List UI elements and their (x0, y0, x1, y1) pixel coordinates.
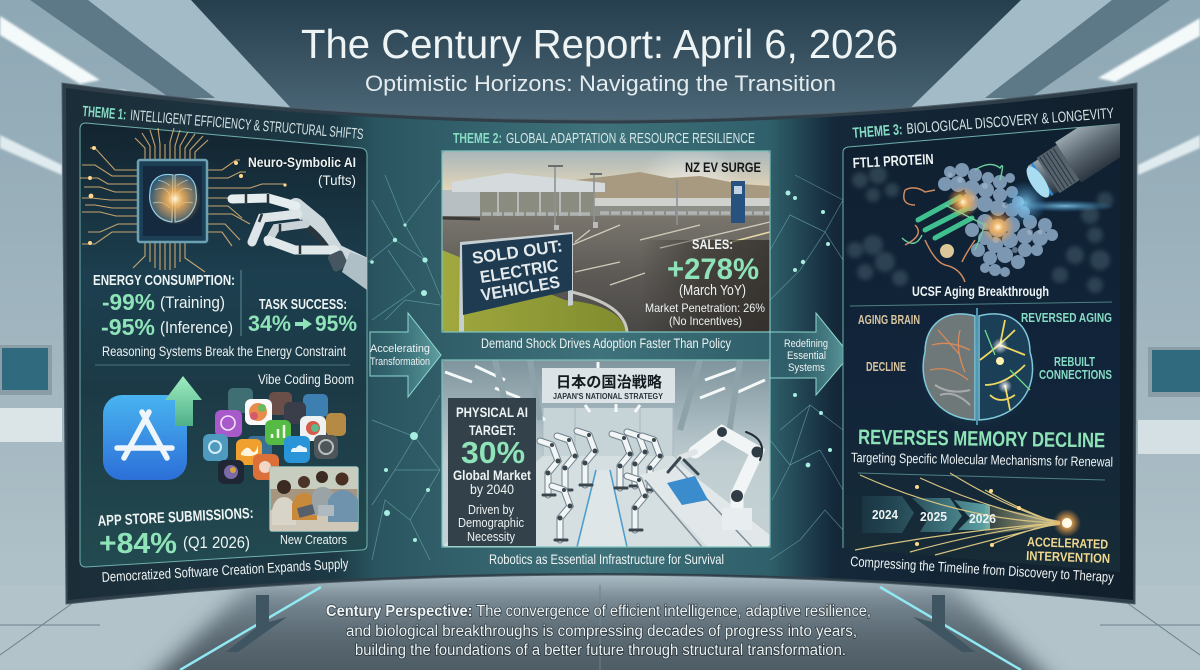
physical AI stat: Global Market (453, 467, 531, 483)
icon: microscope lens (1004, 124, 1120, 224)
blurred background molecules (847, 166, 1113, 293)
arrow: accelerating transformation: Accelerating (370, 343, 430, 355)
japan strategy banner: JAPAN'S NATIONAL STRATEGY (553, 392, 664, 401)
task success stat (248, 297, 357, 336)
brain labels: REBUILT (1054, 355, 1095, 369)
task success stat: 95% (315, 311, 357, 336)
physical AI stat: Demographic (458, 515, 524, 530)
sold out sign (459, 232, 573, 332)
sales stat: SALES: (692, 236, 733, 252)
theme 3 heading (852, 105, 1115, 142)
century perspective text: building the foundations of a better future through structural transformation. (355, 642, 846, 659)
caption: demand shock: Demand Shock Drives Adoption Faster Than Policy (481, 335, 731, 351)
sold out sign: ELECTRIC (479, 256, 560, 287)
theme 1 heading: INTELLIGENT EFFICIENCY & STRUCTURAL SHIFTS (130, 107, 364, 143)
monitor frame (62, 83, 1137, 604)
panel: theme 1 intelligent efficiency (80, 103, 375, 585)
physical AI stat: 30% (461, 435, 525, 470)
energy consumption stat: (Inference) (160, 318, 233, 337)
physical AI stat: by 2040 (470, 481, 514, 497)
sales stat: +278% (667, 253, 759, 286)
caption: reasoning systems: Reasoning Systems Break the Energy Constraint (102, 343, 346, 359)
century perspective text (326, 603, 871, 659)
NZ EV surge label: NZ EV SURGE (685, 159, 761, 175)
brain labels: REVERSED AGING (1021, 311, 1112, 325)
sales stat: (March YoY) (679, 282, 746, 299)
app icon cluster (203, 388, 346, 484)
energy consumption stat: -95% (101, 314, 155, 340)
timeline: accelerated intervention: 2025 (920, 510, 947, 524)
conveyor (640, 465, 770, 547)
plexus network (368, 175, 843, 560)
brain labels: CONNECTIONS (1039, 368, 1112, 382)
app store submissions stat: (Q1 2026) (183, 533, 250, 552)
photo: new creators (270, 467, 358, 531)
glow nodes (88, 146, 287, 245)
new creators caption: New Creators (280, 532, 347, 547)
app store submissions stat: +84% (99, 528, 177, 560)
theme 1 heading: THEME 1: (82, 103, 127, 124)
caption: compressing timeline: Compressing the Timeline from Discovery to Therapy (850, 553, 1114, 585)
timeline: accelerated intervention: 2026 (969, 512, 996, 526)
panel 3 frame (843, 124, 1120, 572)
theme 2 heading: GLOBAL ADAPTATION & RESOURCE RESILIENCE (506, 130, 755, 147)
UCSF caption: UCSF Aging Breakthrough (912, 283, 1049, 299)
arrow: accelerating transformation (370, 313, 441, 397)
arrow: redefining essential systems: Essential (787, 350, 826, 362)
energy consumption stat: ENERGY CONSUMPTION: (93, 272, 235, 289)
caption: robotics: Robotics as Essential Infrastructure for Survival (489, 551, 724, 567)
japan strategy banner: 日本の国治戦略 (556, 373, 662, 391)
theme 1 heading (82, 103, 364, 143)
physical AI stat: TARGET: (469, 422, 516, 438)
caption: targeting mechanisms: Targeting Specific Molecular Mechanisms for Renewal (851, 450, 1113, 470)
subtitle: Optimistic Horizons: Navigating the Transition (365, 71, 836, 96)
brain labels (858, 311, 1112, 382)
century perspective text: and biological breakthroughs is compressing decades of progress into years, (346, 623, 857, 640)
timeline: accelerated intervention (855, 473, 1110, 566)
panel 1 frame (80, 123, 367, 567)
headline: reverses memory decline: REVERSES MEMORY DECLINE (858, 426, 1105, 452)
timeline: accelerated intervention: INTERVENTION (1026, 548, 1110, 566)
timeline: accelerated intervention: ACCELERATED (1027, 534, 1108, 552)
caption: democratized software: Democratized Software Creation Expands Supply (101, 555, 349, 585)
sales stat: Market Penetration: 26% (645, 301, 765, 315)
icon: protein molecule (902, 163, 1058, 282)
energy consumption stat: -99% (102, 289, 155, 315)
physical AI stat: PHYSICAL AI (456, 404, 528, 420)
title: The Century Report: April 6, 2026 (301, 21, 898, 67)
sold out sign: SOLD OUT: (471, 236, 564, 268)
photo: NZ EV dealership (442, 140, 770, 332)
small robots (540, 431, 662, 540)
brain labels: AGING BRAIN (858, 313, 920, 327)
app store submissions stat (97, 505, 254, 560)
vibe coding label: Vibe Coding Boom (258, 372, 354, 387)
icon: chip with brain (138, 160, 207, 242)
photo: japan robotics factory (442, 360, 770, 547)
app store submissions stat: APP STORE SUBMISSIONS: (97, 505, 254, 530)
sales stat (645, 236, 765, 328)
icon: up arrow (165, 376, 202, 426)
icon: split brain (915, 306, 1039, 430)
arrow: redefining essential systems (770, 313, 850, 395)
century perspective text: Century Perspective: The convergence of efficient intelligence, adaptive resilience, (326, 603, 871, 620)
theme 2 heading (453, 130, 755, 147)
icon: app store (103, 395, 187, 480)
panel: theme 2 global adaptation (442, 130, 770, 567)
theme 3 heading: THEME 3: (852, 121, 903, 142)
neuro-symbolic label: Neuro-Symbolic AI (248, 154, 356, 170)
circuit traces (80, 128, 285, 272)
sales stat: (No Incentives) (669, 314, 742, 328)
arrow: redefining essential systems: Systems (788, 362, 825, 374)
FTL1 label: FTL1 PROTEIN (852, 152, 934, 172)
energy consumption stat (93, 272, 235, 340)
neuro-symbolic label: (Tufts) (318, 172, 356, 188)
task success stat: TASK SUCCESS: (259, 297, 347, 313)
physical AI stat: Necessity (467, 529, 515, 544)
arrow: redefining essential systems: Redefining (784, 338, 828, 350)
japan strategy banner (542, 368, 675, 403)
panel: theme 3 biological discovery (843, 104, 1140, 585)
theme 2 heading: THEME 2: (453, 130, 502, 147)
neuro-symbolic label (248, 154, 356, 188)
theme 3 heading: BIOLOGICAL DISCOVERY & LONGEVITY (906, 105, 1115, 138)
physical AI stat: Driven by (468, 502, 514, 517)
physical AI stat (448, 398, 536, 546)
timeline: accelerated intervention: 2024 (872, 508, 898, 522)
icon: robot hand (232, 194, 375, 290)
brain labels: DECLINE (866, 360, 906, 374)
energy consumption stat: (Training) (160, 293, 225, 312)
arrow: accelerating transformation: Transformation (370, 356, 430, 368)
task success stat: 34% (248, 311, 291, 336)
sold out sign: VEHICLES (479, 272, 561, 305)
big arm (668, 432, 762, 520)
